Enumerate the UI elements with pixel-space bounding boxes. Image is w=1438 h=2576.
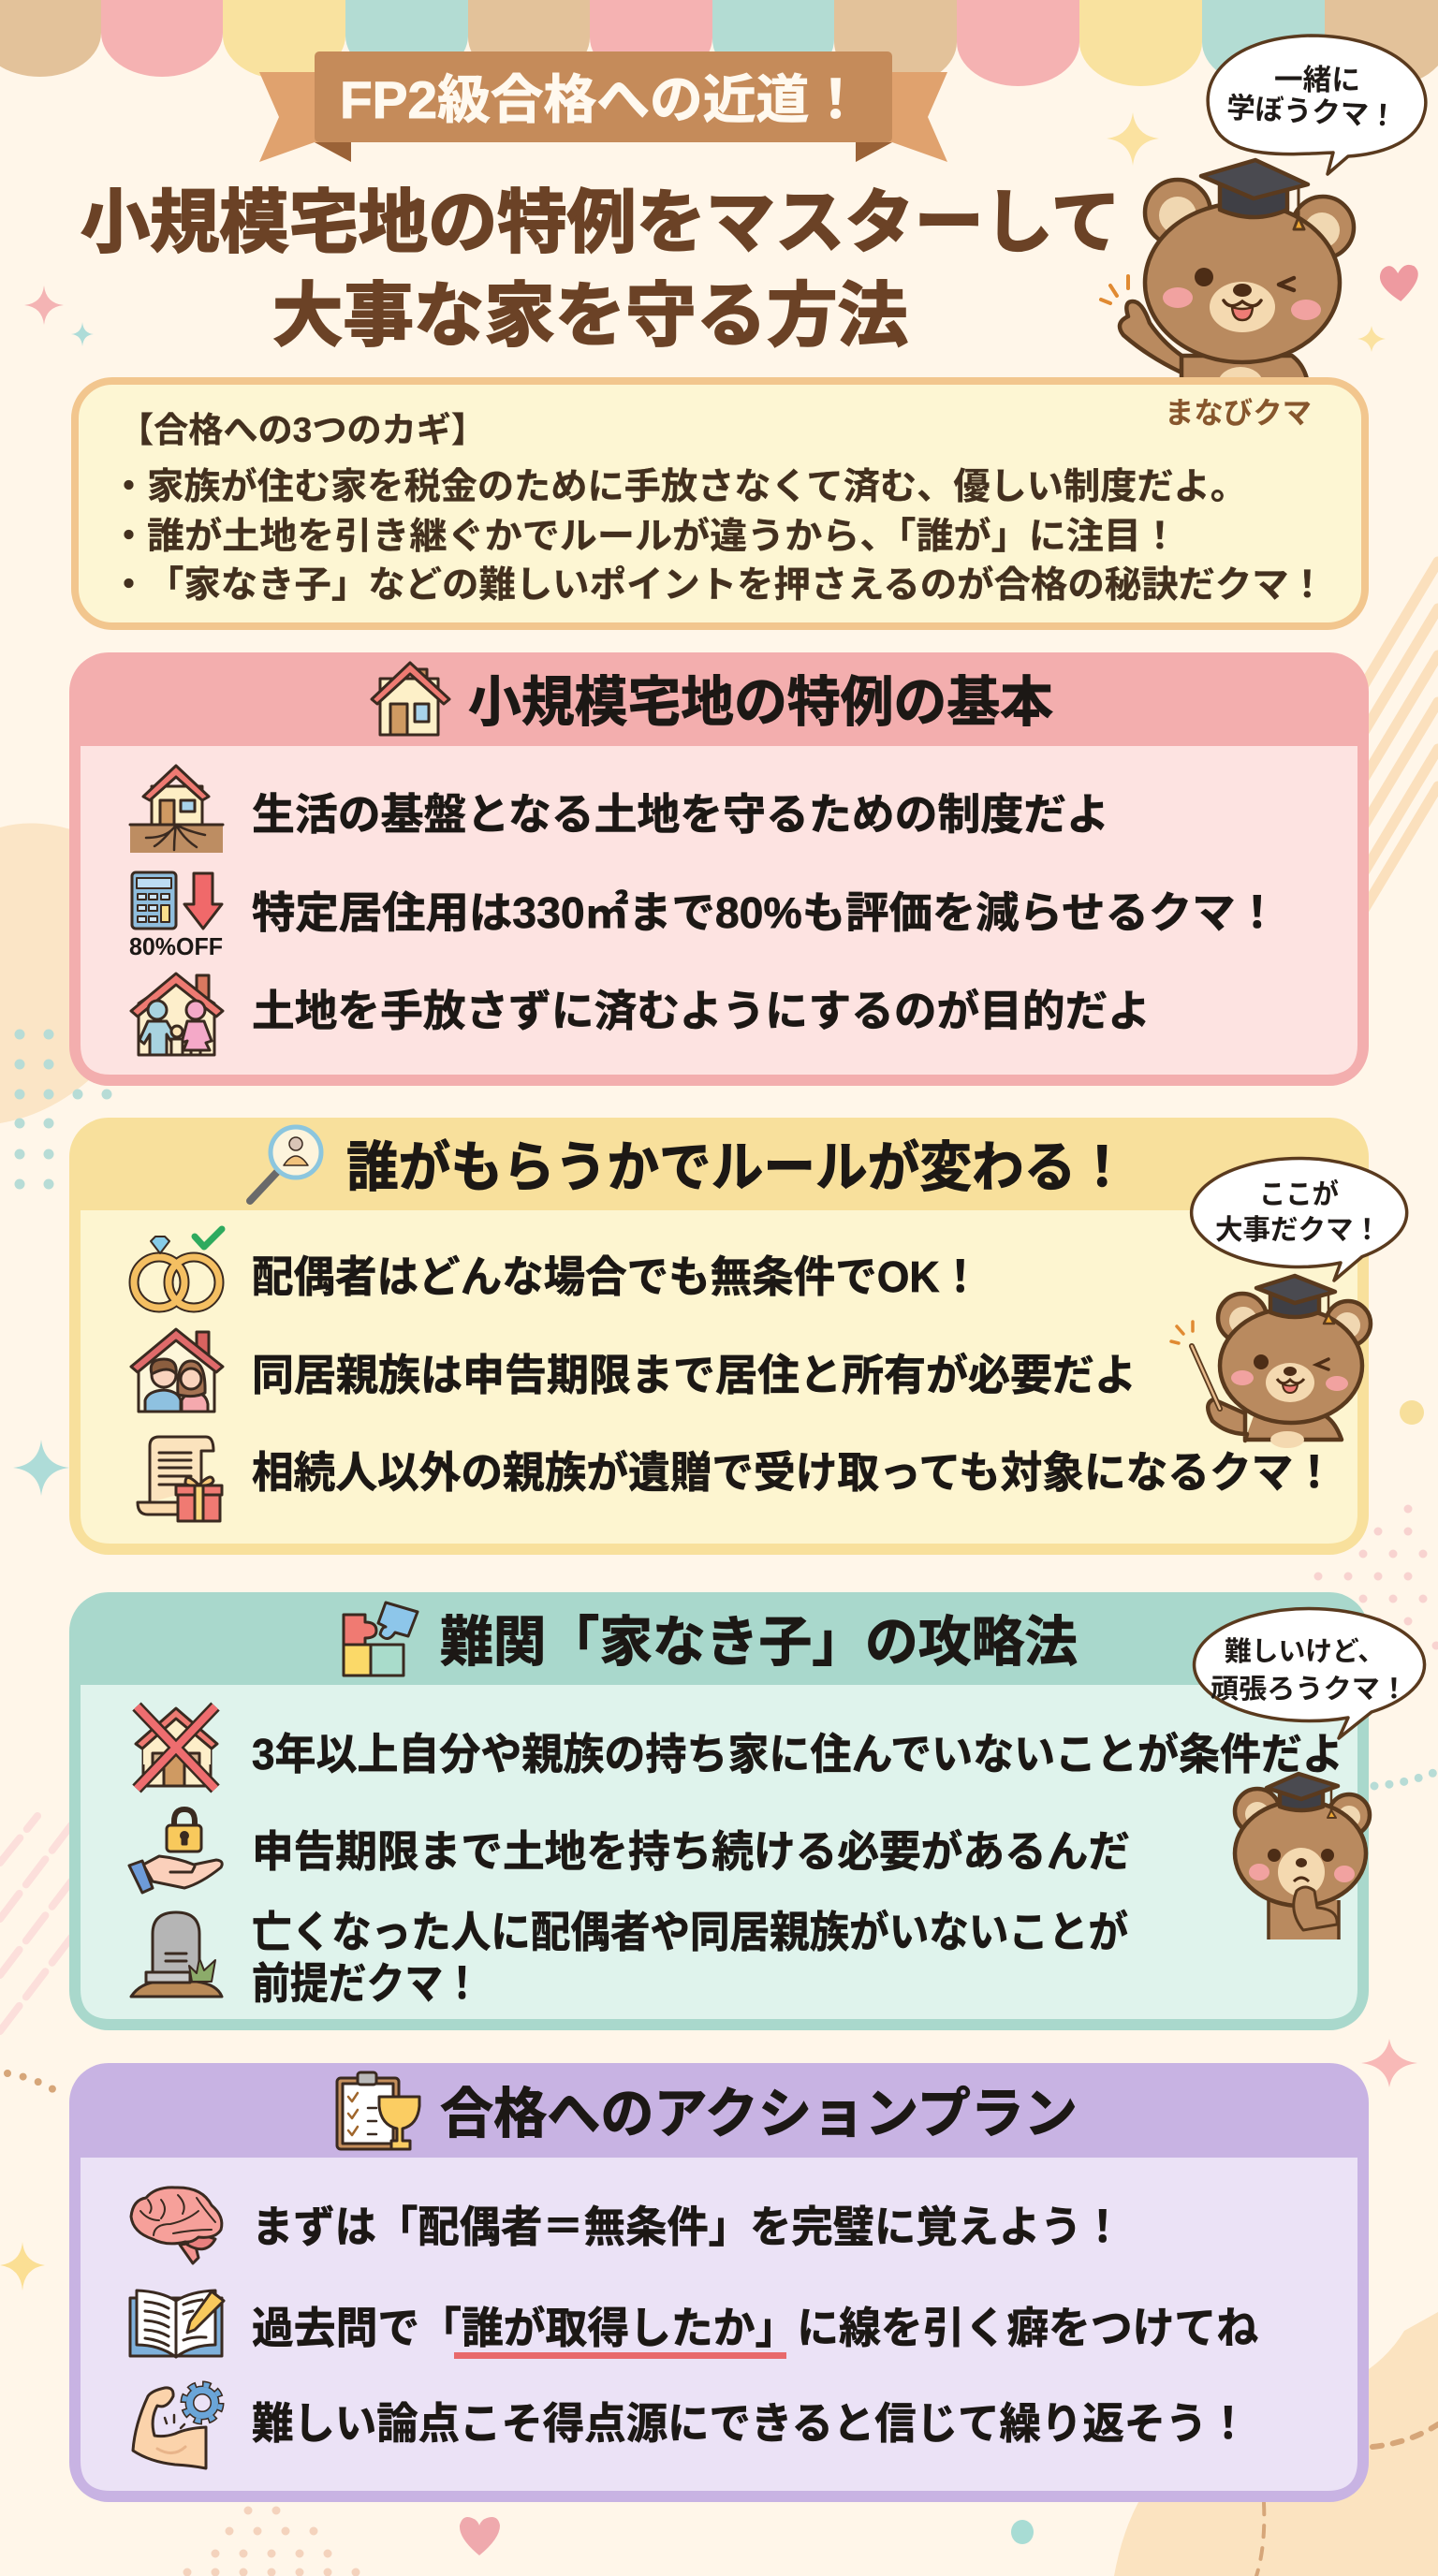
icon: muscle arm and gear — [133, 2385, 221, 2468]
panel: action plan — [69, 2063, 1369, 2502]
key point 3: ・ — [110, 565, 147, 606]
speech bubble: top bear — [1208, 36, 1426, 174]
text: bequest: 相続人以外の親族が遺贈で受け取っても対象になるクマ！ — [252, 1448, 1335, 1497]
key heading: 【合格への3つのカギ】 — [119, 411, 486, 449]
text: precondition: 前提だクマ！ — [252, 1959, 481, 2008]
text: row 1: 生活の基盤となる土地を守るための制度だよ — [252, 790, 1109, 839]
heading: ienakiko: 難関「家なき子」の攻略法 — [440, 1612, 1078, 1673]
speech bubble: pointer bear: ここが — [1259, 1178, 1339, 1210]
heading: action plan: 合格へのアクションプラン — [440, 2084, 1078, 2144]
text: no own home: 3年以上自分や親族の持ち家に住んでいないことが条件だよ — [252, 1730, 1343, 1778]
icon: padlock in hand — [129, 1809, 222, 1893]
mascot: top bear waving — [1101, 160, 1354, 402]
icon: clipboard and trophy — [337, 2072, 419, 2149]
heading: basics: 小規模宅地の特例の基本 — [468, 672, 1053, 733]
panel: 3 keys summary — [75, 381, 1365, 626]
icon: brain — [131, 2188, 222, 2263]
speech bubble: pointer bear: 大事だクマ！ — [1215, 1215, 1381, 1246]
icon: gravestone — [131, 1912, 222, 1997]
key point 3: 「家なき子」などの難しいポイントを押さえるのが合格の秘訣だクマ！ — [147, 565, 1326, 606]
icon: will scroll and gift — [138, 1437, 222, 1521]
speech bubble: top bear: 一緒に — [1274, 64, 1360, 96]
main title: 小規模宅地の特例をマスターして — [81, 183, 1121, 261]
icon: family in house — [131, 973, 223, 1055]
speech bubble: top bear: 学ぼうクマ！ — [1225, 91, 1398, 133]
mascot name: まなびクマ — [1165, 396, 1312, 430]
icon: house with roots — [130, 766, 223, 853]
text: precondition: 亡くなった人に配偶者や同居親族がいないことが — [252, 1908, 1128, 1956]
text: row 3: 土地を手放さずに済むようにするのが目的だよ — [252, 987, 1151, 1035]
icon: magnifier — [250, 1127, 321, 1201]
ribbon banner — [259, 51, 947, 162]
text: spouse: 配偶者はどんな場合でも無条件でOK！ — [252, 1252, 981, 1301]
panel: who inherits — [69, 1118, 1369, 1555]
text: memorize: まずは「配偶者＝無条件」を完璧に覚えよう！ — [252, 2203, 1123, 2251]
key point 1: 家族が住む家を税金のために手放さなくて済む、優しい制度だよ。 — [147, 467, 1247, 507]
panel: ienakiko — [69, 1592, 1369, 2030]
underline highlight — [454, 2352, 786, 2359]
panel: basics — [69, 652, 1369, 1086]
key point 2: ・ — [110, 517, 147, 557]
striped awning — [0, 0, 1438, 86]
text: precondition — [252, 1908, 1128, 2008]
icon: open book with pencil — [130, 2291, 224, 2357]
main title — [81, 183, 1121, 355]
icon: wedding rings — [134, 1229, 222, 1308]
speech bubble: thinking bear: 難しいけど、 — [1225, 1636, 1385, 1667]
text: co-resident relatives: 同居親族は申告期限まで居住と所有が必要だよ — [252, 1351, 1137, 1399]
icon label: 80%OFF: 80%OFF — [129, 932, 223, 960]
text: row 2: 特定居住用は330㎡まで80%も評価を減らせるクマ！ — [252, 888, 1279, 937]
icon: crossed-out house — [136, 1706, 217, 1789]
key point 2: 誰が土地を引き継ぐかでルールが違うから、「誰が」に注目！ — [147, 517, 1179, 557]
mascot: thinking bear — [1235, 1774, 1370, 1939]
text: keep land: 申告期限まで土地を持ち続ける必要があるんだ — [252, 1827, 1130, 1876]
speech bubble: pointer bear — [1192, 1158, 1407, 1281]
mascot: bear with pointer — [1171, 1276, 1371, 1448]
icon: calculator and down arrow — [132, 872, 222, 929]
speech bubble: thinking bear: 頑張ろうクマ！ — [1211, 1675, 1408, 1705]
main title: 大事な家を守る方法 — [272, 276, 908, 355]
text: past exams: 過去問で「誰が取得したか」に線を引く癖をつけてね — [252, 2304, 1258, 2352]
text: repeat: 難しい論点こそ得点源にできると信じて繰り返そう！ — [252, 2399, 1249, 2448]
icon: puzzle — [344, 1603, 418, 1676]
banner text: FP2級合格への近道！ — [340, 70, 862, 129]
speech bubble: thinking bear — [1195, 1609, 1425, 1738]
key point 1: ・ — [110, 467, 147, 507]
icon: house — [372, 663, 449, 735]
heading: who inherits: 誰がもらうかでルールが変わる！ — [346, 1137, 1128, 1198]
icon: couple in house — [131, 1329, 223, 1412]
